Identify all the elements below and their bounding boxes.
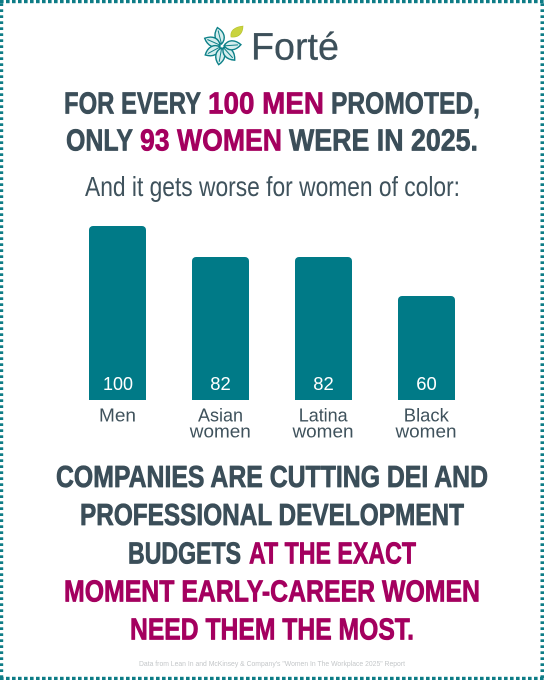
icon: leaf rosette [203, 26, 243, 65]
headline: 93 WOMEN [140, 122, 282, 158]
source note: Data from Lean In and McKinsey & Company's "Women In The Workplace 2025" Report [139, 659, 406, 668]
bar: Latina women [291, 257, 354, 442]
bar: Black women: women [394, 422, 456, 442]
bar: Asian women: Asian [198, 406, 243, 426]
bar: Asian women [189, 257, 251, 442]
closing statement: BUDGETS [128, 536, 241, 570]
bar: Asian women: women [189, 422, 251, 442]
closing statement [56, 460, 488, 646]
bar: Black women [394, 296, 456, 442]
headline: 100 MEN [208, 86, 324, 120]
logo: Forté [203, 26, 339, 68]
headline: ONLY [66, 122, 133, 158]
closing statement: AT THE EXACT [249, 536, 416, 570]
bar: Men [89, 226, 146, 426]
bar: Asian women: 82 [210, 374, 231, 394]
bar chart [89, 226, 456, 442]
closing statement: NEED THEM THE MOST. [130, 612, 414, 646]
subheading: And it gets worse for women of color: [85, 171, 460, 202]
bar: Latina women: 82 [313, 374, 334, 394]
headline: PROMOTED, [331, 86, 480, 120]
headline: WERE IN 2025. [289, 122, 478, 158]
logo wordmark: Forté [251, 26, 339, 68]
bar: Men: Men [99, 406, 136, 426]
bar: Black women: Black [404, 406, 450, 426]
headline: FOR EVERY [64, 86, 201, 120]
bar: Men: 100 [103, 374, 133, 394]
bar: Black women: 60 [416, 374, 437, 394]
headline [64, 86, 480, 158]
bar: Latina women: Latina [299, 406, 349, 426]
bar: Latina women: women [291, 422, 354, 442]
